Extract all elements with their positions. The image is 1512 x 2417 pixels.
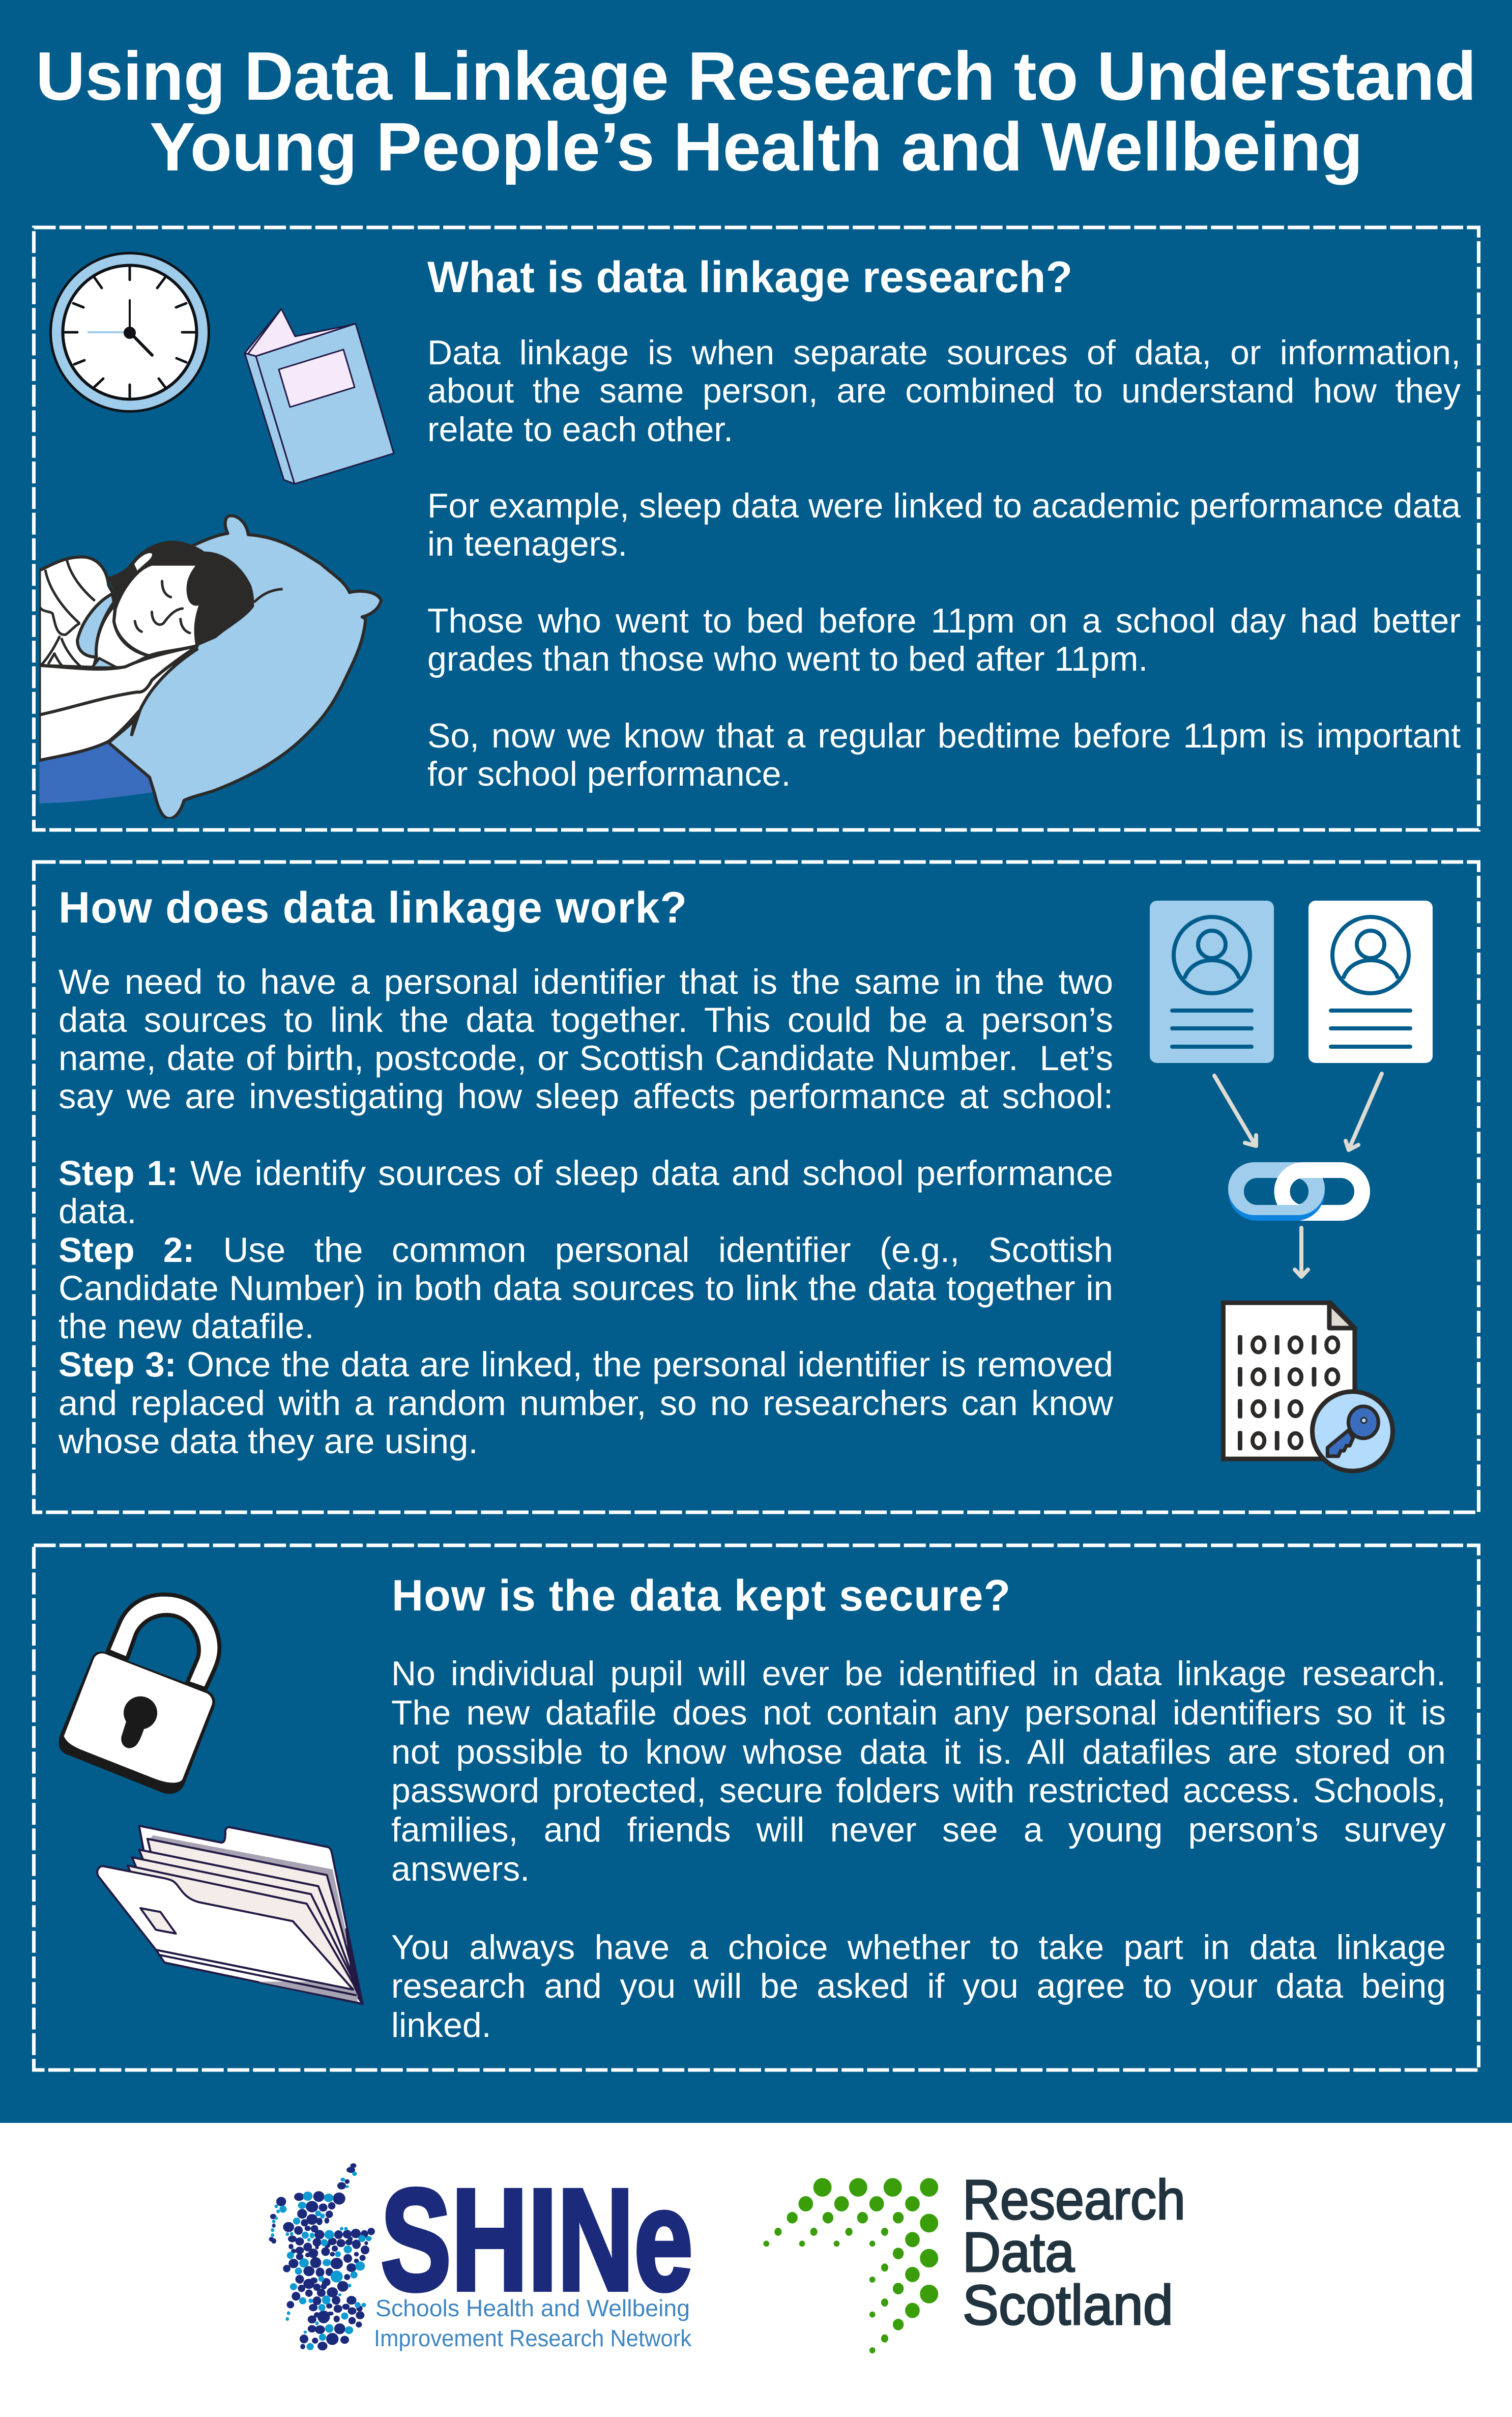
text: how linkage works and steps: Step 3: Once the data are linked, the personal identifier is removed — [59, 1345, 1113, 1384]
text: how linkage works and steps: the new datafile. — [59, 1307, 314, 1346]
heading: What is data linkage research? — [427, 253, 1072, 302]
Research Data Scotland wordmark — [963, 2169, 1185, 2337]
text: how linkage works and steps: Step 1: We identify sources of sleep data and school performance — [59, 1154, 1113, 1193]
text: data linkage explanation: for school performance. — [427, 755, 791, 793]
green dots — [764, 2178, 938, 2353]
Research Data Scotland wordmark: Scotland — [963, 2274, 1173, 2337]
SHINE strapline: Schools Health and Wellbeing — [375, 2295, 690, 2321]
text: how linkage works and steps: Candidate Number) in both data sources to link the data together in — [59, 1269, 1113, 1308]
hair — [108, 541, 254, 646]
text: how linkage works and steps: We need to have a personal identifier that is the same in the two — [59, 962, 1113, 1001]
text: how linkage works and steps: data. — [59, 1192, 136, 1231]
SHINE strapline: Improvement Research Network — [374, 2325, 692, 2351]
arrow: link to datafile — [1295, 1228, 1308, 1277]
face — [114, 564, 201, 656]
text: data linkage explanation: relate to each other. — [427, 410, 733, 449]
blanket and arm — [39, 557, 115, 668]
title: Using Data Linkage Research to Understand — [36, 38, 1476, 114]
illustration: sleeping teenager on a pillow — [39, 515, 381, 819]
Research Data Scotland wordmark: Data — [963, 2221, 1075, 2284]
icon: book — [245, 309, 394, 484]
SHINE map dots — [270, 2164, 374, 2350]
text: data linkage explanation: about the same person, are combined to understand how they — [427, 371, 1461, 410]
icon: profile card (light blue) — [1150, 901, 1274, 1063]
text: how linkage works and steps: Step 2: Use the common personal identifier (e.g., Scottish — [59, 1230, 1113, 1270]
text: how linkage works and steps: data sources to link the data together. This could be a person’s — [59, 1000, 1113, 1040]
text: how linkage works and steps: and replaced with a random number, so no researchers can know — [59, 1384, 1113, 1423]
icon: profile card (white) — [1309, 901, 1433, 1063]
text: data linkage explanation: in teenagers. — [427, 525, 627, 563]
text: data security: linked. — [391, 2006, 491, 2045]
footer: logos — [0, 2123, 1512, 2417]
Research Data Scotland wordmark: Research — [963, 2169, 1185, 2231]
panel: how is the data kept secure — [32, 1544, 1480, 2072]
text: data linkage explanation — [427, 333, 1461, 793]
icon: binary datafile with key — [1223, 1303, 1392, 1471]
icon: chain link — [1228, 1162, 1362, 1221]
heading: How does data linkage work? — [59, 883, 687, 932]
panel: how does data linkage work — [32, 860, 1480, 1514]
SHINE strapline — [374, 2295, 692, 2351]
logo: SHINE — [270, 2159, 693, 2351]
text: data security: families, and friends will never see a young person’s survey — [391, 1810, 1446, 1849]
pillow — [109, 515, 381, 819]
title: Young People’s Health and Wellbeing — [150, 108, 1363, 185]
icon: padlock — [59, 1595, 219, 1794]
text: data linkage explanation: For example, sleep data were linked to academic performance data — [427, 486, 1461, 525]
text: data security: not possible to know whose data it is. All datafiles are stored on — [391, 1733, 1446, 1771]
text: data security: answers. — [391, 1850, 530, 1888]
text: data security — [391, 1654, 1446, 2045]
sheet — [39, 741, 155, 803]
collar — [77, 594, 114, 657]
text: data security: You always have a choice whether to take part in data linkage — [391, 1928, 1446, 1967]
icon: wall clock — [51, 253, 209, 411]
text: data security: The new datafile does not contain any personal identifiers so it is — [391, 1693, 1446, 1732]
icon: folder of documents — [97, 1826, 363, 2004]
arrow: left card to link — [1214, 1076, 1256, 1146]
heading: How is the data kept secure? — [392, 1571, 1010, 1620]
text: data linkage explanation: grades than those who went to bed after 11pm. — [427, 640, 1148, 678]
SHINE wordmark: SHINe — [381, 2159, 693, 2321]
text: data security: research and you will be asked if you agree to your data being — [391, 1967, 1446, 2005]
text: data security: No individual pupil will ever be identified in data linkage research. — [391, 1654, 1446, 1693]
text: how linkage works and steps: name, date of birth, postcode, or Scottish Candidate Number. Let’s — [59, 1039, 1113, 1078]
text: data security: password protected, secure folders with restricted access. Schools, — [391, 1771, 1446, 1810]
text: data linkage explanation: So, now we know that a regular bedtime before 11pm is important — [427, 716, 1461, 755]
logo: Research Data Scotland — [764, 2169, 1185, 2353]
text: how linkage works and steps: say we are investigating how sleep affects performance at school: — [59, 1077, 1113, 1116]
title — [36, 38, 1476, 185]
text: how linkage works and steps — [58, 962, 1113, 1461]
text: data linkage explanation: Those who went to bed before 11pm on a school day had better — [427, 601, 1461, 640]
text: how linkage works and steps: whose data they are using. — [59, 1422, 478, 1461]
panel: what is data linkage research — [32, 226, 1480, 831]
text: data linkage explanation: Data linkage is when separate sources of data, or information, — [427, 333, 1461, 372]
arrow: right card to link — [1346, 1074, 1382, 1150]
